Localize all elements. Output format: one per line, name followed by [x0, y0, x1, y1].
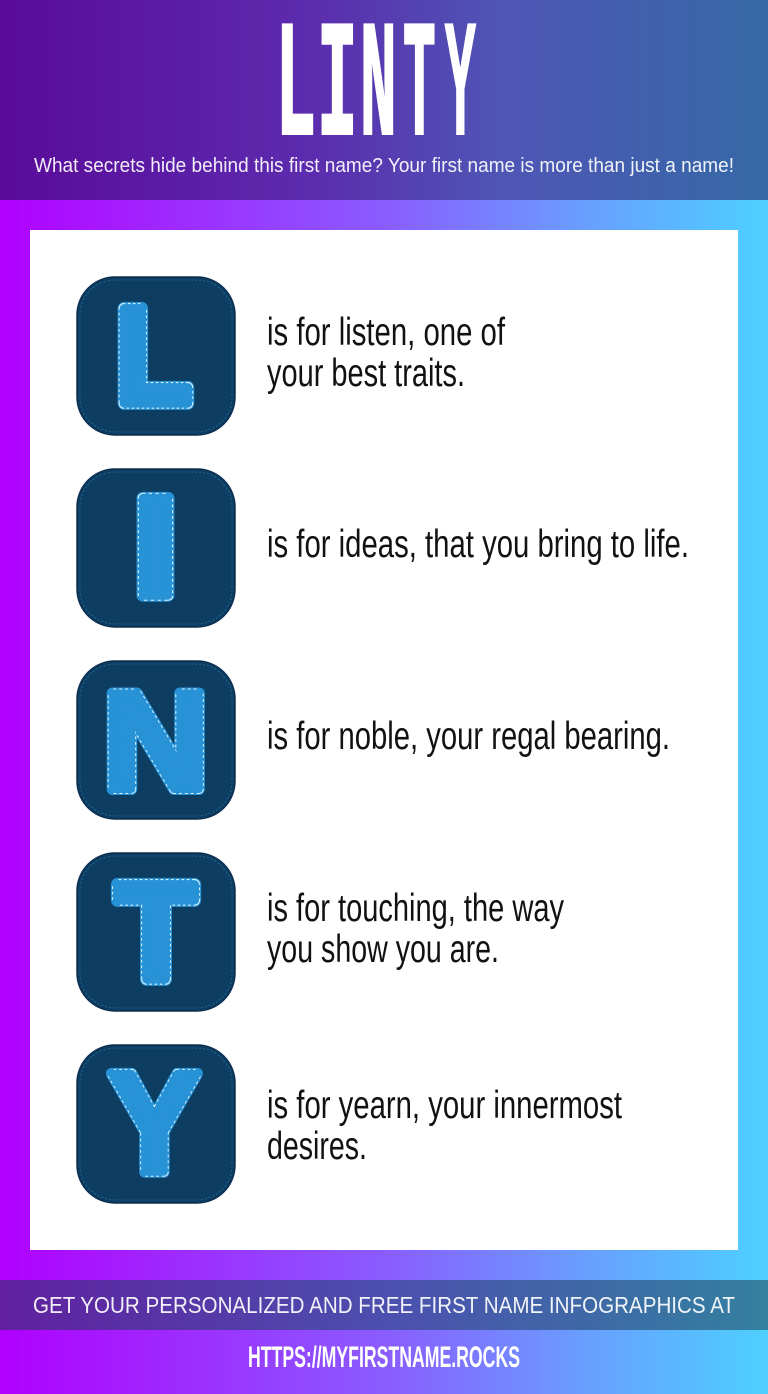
row: L — [77, 277, 505, 435]
icon: letter T: T — [116, 856, 196, 1009]
text: Y line: desires. — [267, 1125, 367, 1168]
title: LINTY: I — [317, 0, 358, 183]
text: T line: you show you are. — [267, 928, 499, 971]
icon: letter I: I — [132, 467, 179, 627]
text: T line: is for touching, the way — [267, 887, 564, 930]
footer url: HTTPS://MYFIRSTNAME.ROCKS — [248, 1341, 520, 1374]
title: LINTY: N — [360, 0, 397, 184]
title: LINTY — [276, 0, 476, 184]
row: N — [77, 661, 670, 820]
icon: letter I: I — [132, 467, 179, 627]
title: LINTY: T — [403, 0, 436, 183]
icon: letter Y: Y — [109, 1043, 200, 1203]
icon: letter L: L — [116, 279, 192, 432]
icon: letter N — [77, 661, 235, 820]
row: Y — [77, 1043, 622, 1203]
icon: letter I: I — [132, 467, 179, 627]
text: Y line: is for yearn, your innermost — [267, 1084, 622, 1127]
icon: letter T: T — [116, 856, 196, 1009]
row: T — [77, 853, 564, 1011]
icon: letter L: L — [116, 279, 192, 432]
icon: letter L — [77, 277, 235, 435]
text: L line: is for listen, one of — [267, 311, 505, 354]
icon: letter Y: Y — [109, 1043, 200, 1203]
icon: letter I — [77, 467, 235, 627]
icon: letter T: T — [116, 856, 196, 1009]
row: I — [77, 467, 689, 627]
icon: letter T — [77, 853, 235, 1011]
icon: letter Y — [77, 1043, 235, 1203]
icon: letter L: L — [116, 279, 192, 432]
title: LINTY: L — [276, 0, 316, 183]
header band — [0, 0, 768, 200]
title: LINTY: Y — [445, 0, 476, 183]
icon: letter Y: Y — [109, 1043, 200, 1203]
icon: letter N: N — [103, 664, 209, 820]
subtitle: What secrets hide behind this first name? Your first name is more than just a name! — [34, 155, 734, 177]
icon: letter N: N — [103, 664, 209, 820]
white panel — [30, 230, 738, 1250]
icon: letter N: N — [103, 664, 209, 820]
footer band — [0, 1280, 768, 1330]
text: L line: your best traits. — [267, 352, 465, 395]
